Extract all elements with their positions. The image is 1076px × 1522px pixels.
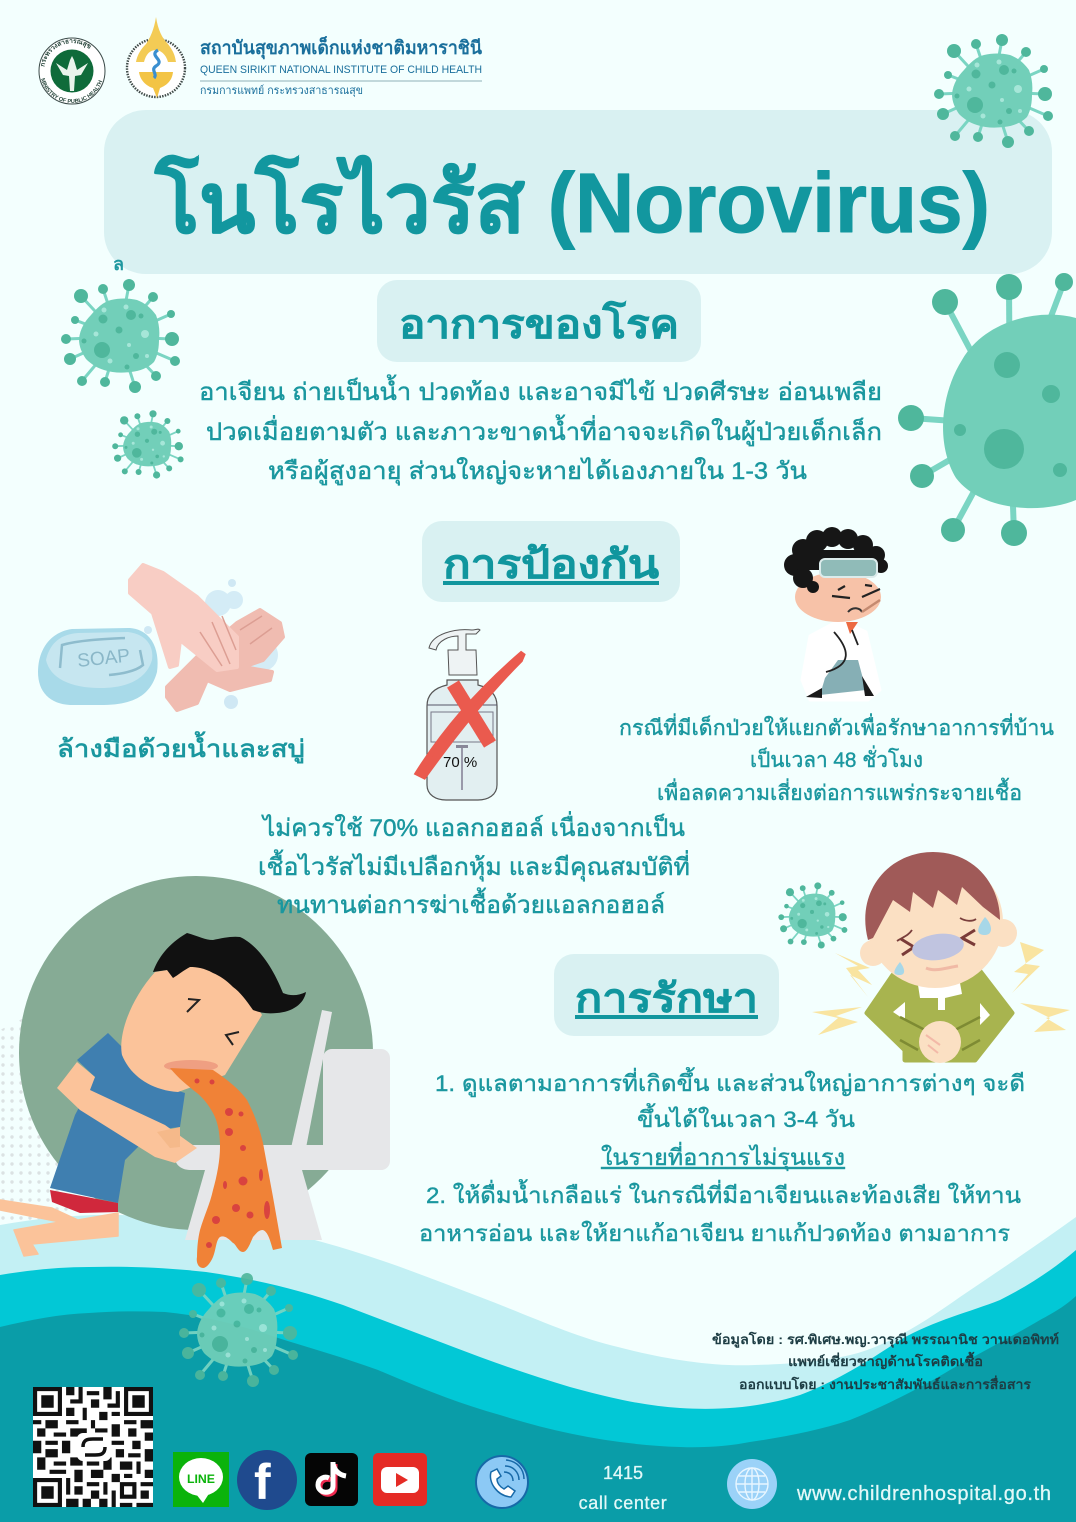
toilet — [175, 1010, 390, 1240]
arm — [57, 1062, 197, 1163]
institute name: QUEEN SIRIKIT NATIONAL INSTITUTE OF CHILD HEALTH — [200, 64, 482, 76]
text: isolate at home: เพื่อลดความเสี่ยงต่อการแพร่กระจายเชื้อ — [657, 778, 1022, 805]
call center number — [579, 1463, 667, 1513]
text: symptoms: หรือผู้สูงอายุ ส่วนใหญ่จะหายได้เองภายใน 1-3 วัน — [268, 457, 807, 486]
icon: sick child in blanket — [784, 527, 888, 700]
credits: ข้อมูลโดย : รศ.พิเศษ.พญ.วารุณี พรรณานิช วานเดอพิทท์ — [712, 1331, 1059, 1348]
illustration: boy with stomach ache — [812, 852, 1070, 1063]
institute name: สถาบันสุขภาพเด็กแห่งชาติมหาราชินี — [200, 35, 482, 60]
illustration: patient vomiting into toilet — [0, 876, 390, 1268]
text: do not use alcohol: เชื้อไวรัสไม่มีเปลือกหุ้ม และมีคุณสมบัติที่ — [258, 849, 690, 882]
icon: big virus right — [898, 273, 1076, 546]
stray letter over title panel corner: ล — [113, 254, 124, 274]
icon: LINE: LINE — [187, 1472, 215, 1486]
shirt — [50, 1033, 185, 1203]
halftone dots behind patient — [0, 1005, 190, 1260]
credits: แพทย์เชี่ยวชาญด้านโรคติดเชื้อ — [788, 1351, 983, 1370]
logo: ministry of public health — [38, 38, 106, 104]
logo: queen sirikit institute — [127, 17, 185, 98]
icon: virus left small — [112, 410, 184, 479]
website: www.childrenhospital.go.th — [796, 1483, 1051, 1505]
text: isolate at home: กรณีที่มีเด็กป่วยให้แยกตัวเพื่อรักษาอาการที่บ้าน — [619, 713, 1054, 740]
icon: virus bottom — [179, 1273, 298, 1387]
call center number: call center — [579, 1493, 667, 1513]
icon: sanitizer bottle crossed out: 70 % — [443, 754, 477, 771]
wave: pale — [0, 1215, 1076, 1522]
institute name — [200, 35, 482, 97]
heading: symptoms: อาการของโรค — [399, 301, 679, 347]
text: do not use alcohol: ไม่ควรใช้ 70% แอลกอฮอล์ เนื่องจากเป็น — [261, 811, 685, 842]
icon: Facebook: f — [254, 1454, 271, 1510]
credits: ออกแบบโดย : งานประชาสัมพันธ์และการสื่อสาร — [739, 1375, 1031, 1392]
text: isolate at home — [619, 713, 1054, 805]
QR code — [33, 1387, 153, 1507]
wave: cyan — [0, 1250, 1076, 1522]
text: isolate at home: เป็นเวลา 48 ชั่วโมง — [750, 745, 923, 772]
shorts — [50, 1190, 118, 1213]
text: symptoms: ปวดเมื่อยตามตัว และภาวะขาดน้ำที่อาจจะเกิดในผู้ป่วยเด็กเล็ก — [206, 414, 882, 447]
text: treatment steps: ขึ้นได้ในเวลา 3-4 วัน — [637, 1103, 855, 1132]
heading: prevention — [422, 521, 680, 602]
logo: ministry of public health: กระทรวงสาธารณสุข — [41, 39, 92, 67]
eyes — [187, 999, 239, 1045]
caption: wash hands: ล้างมือด้วยน้ำและสบู่ — [57, 731, 305, 764]
text: symptoms: อาเจียน ถ่ายเป็นน้ำ ปวดท้อง และอาจมีไข้ ปวดศีรษะ อ่อนเพลีย — [199, 374, 882, 406]
head — [121, 960, 262, 1092]
heading: symptoms — [377, 280, 701, 362]
institute name: กรมการแพทย์ กระทรวงสาธารณสุข — [200, 84, 363, 97]
icon: virus near sick boy — [778, 882, 847, 948]
text: do not use alcohol — [258, 811, 690, 919]
text: treatment steps: ในรายที่อาการไม่รุนแรง — [601, 1141, 845, 1171]
text: treatment steps: 2. ให้ดื่มน้ำเกลือแร่ ในกรณีที่มีอาเจียนและท้องเสีย ให้ทาน — [426, 1179, 1021, 1208]
heading: treatment: การรักษา — [575, 977, 758, 1021]
icon: virus left large — [61, 279, 180, 393]
text: treatment steps: อาหารอ่อน และให้ยาแก้อาเจียน ยาแก้ปวดท้อง ตามอาการ — [419, 1221, 1010, 1246]
backdrop circle — [19, 876, 373, 1230]
icon: virus top right — [934, 34, 1053, 148]
icon: hand washing with soap: SOAP — [76, 646, 131, 672]
icon: phone — [476, 1456, 528, 1508]
vomit — [170, 1068, 282, 1268]
hair — [153, 933, 306, 1013]
text: treatment steps: 1. ดูแลตามอาการที่เกิดขึ้น และส่วนใหญ่อาการต่างๆ จะดี — [435, 1067, 1025, 1097]
heading: treatment — [554, 954, 779, 1036]
icon: LINE — [173, 1452, 229, 1507]
icon: hand washing with soap — [38, 565, 283, 710]
icon: Facebook — [237, 1450, 297, 1510]
icon: globe — [727, 1459, 777, 1509]
icon: TikTok — [305, 1453, 358, 1506]
legs — [0, 1200, 118, 1256]
mouth — [164, 1060, 218, 1072]
text: symptoms — [199, 374, 882, 486]
text: treatment steps — [419, 1067, 1025, 1246]
credits — [712, 1331, 1059, 1392]
title panel — [104, 110, 1052, 274]
icon: YouTube — [373, 1453, 427, 1506]
title: โนโรไวรัส (Norovirus) — [154, 155, 990, 250]
wave: teal — [0, 1296, 1076, 1522]
call center number: 1415 — [603, 1463, 643, 1483]
heading: prevention: การป้องกัน — [443, 543, 659, 587]
icon: sanitizer bottle crossed out — [418, 629, 523, 800]
logo: ministry of public health: MINISTRY OF PUBLIC HEALTH — [41, 78, 102, 103]
text: do not use alcohol: ทนทานต่อการฆ่าเชื้อด้วยแอลกอฮอล์ — [277, 887, 665, 919]
